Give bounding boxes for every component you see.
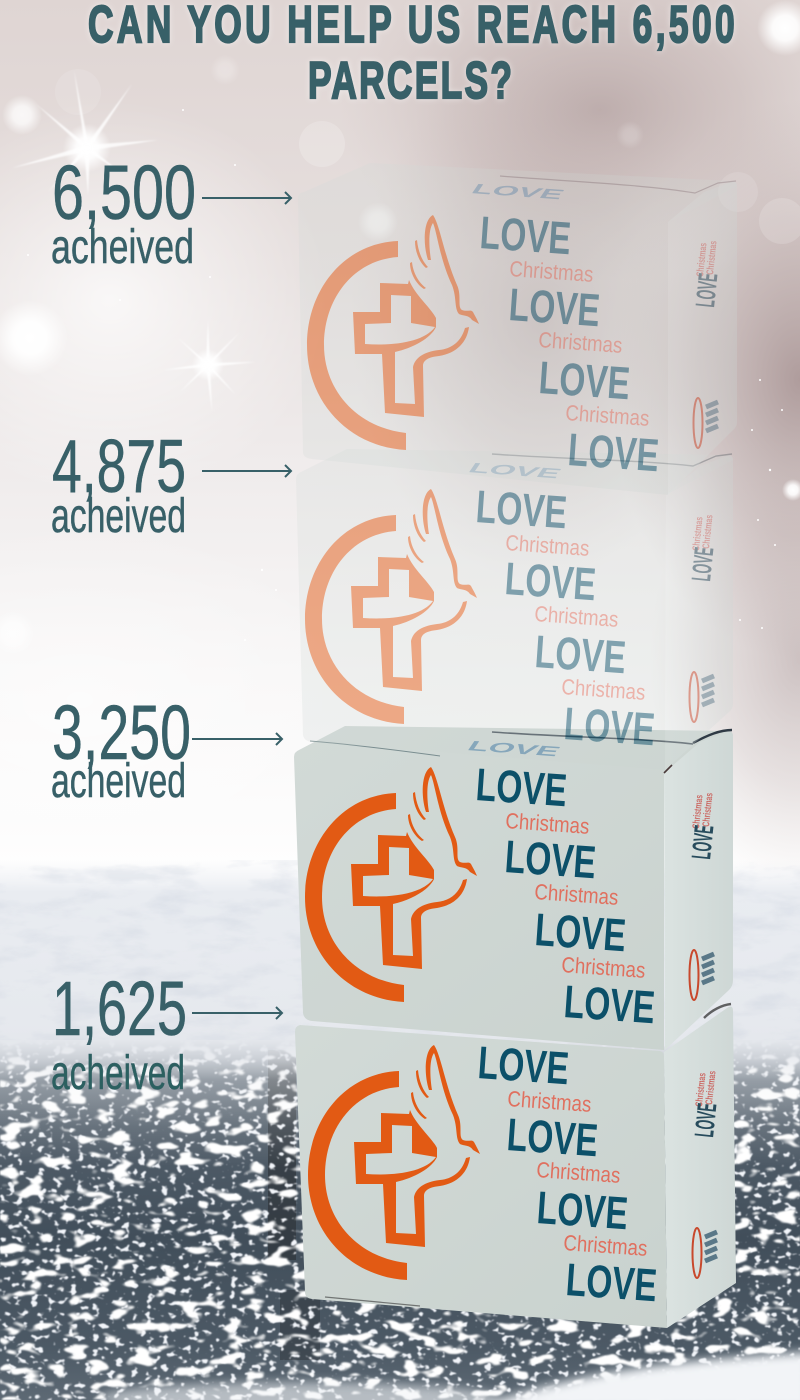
- milestone: 1,625 achieved: [51, 966, 187, 1100]
- box 4 side face: [668, 182, 737, 495]
- box 2 side print: LOVE: [686, 824, 720, 861]
- background: frosted snow bank: [0, 860, 800, 1060]
- sparkle star middle left: [164, 320, 256, 412]
- title: PARCELS?: [308, 52, 512, 110]
- box 3 side print: LOVE: [686, 546, 720, 583]
- box 4 love and christmas print: Christmas: [509, 256, 594, 287]
- box 1 side print: Christmas: [704, 1070, 719, 1105]
- box 2 love and christmas print: Christmas: [534, 879, 619, 910]
- sparkle star right edge: [782, 479, 800, 501]
- milestone: 6,500 achieved: 6,500: [52, 150, 196, 236]
- box 3 love and christmas print: Christmas: [534, 601, 619, 632]
- milestone: 3,250 achieved: acheived: [51, 755, 186, 808]
- box 4 love and christmas print: Christmas: [538, 327, 623, 358]
- box 2 love and christmas print: Christmas: [505, 808, 590, 839]
- box 3 flap print: LOVE: [465, 460, 565, 482]
- arrow: 1,625 to box: [192, 1007, 282, 1019]
- box 1 love and christmas print: LOVE: [476, 1036, 571, 1094]
- box 4 charity logo: [307, 215, 479, 450]
- box 3 love and christmas print: LOVE: [533, 625, 628, 683]
- bokeh lights and sparkle dots: [0, 0, 800, 655]
- box 3 love and christmas print: [474, 480, 657, 755]
- box 3 side print: [686, 514, 720, 722]
- box 1 front face: [295, 1025, 667, 1328]
- milestone: 1,625 achieved: 1,625: [52, 966, 187, 1052]
- milestone: 3,250 achieved: 3,250: [52, 690, 191, 776]
- box 1 charity logo: [308, 1045, 480, 1280]
- box 1 side face: [664, 1007, 736, 1328]
- box 1 (bottom, achieved): [295, 1004, 736, 1328]
- box 1 side print: Christmas: [694, 1072, 709, 1107]
- box 2 flap print: LOVE: [464, 738, 564, 760]
- box 2 love and christmas print: LOVE: [503, 830, 598, 888]
- box 2 love and christmas print: LOVE: [562, 975, 657, 1033]
- arrow: 3,250 to box: [192, 733, 282, 745]
- box 2 side face: [664, 732, 733, 1050]
- box 4 side print: LOVE: [690, 272, 724, 309]
- box 2 charity logo: [305, 767, 477, 1002]
- title: [88, 0, 735, 110]
- box 3 love and christmas print: LOVE: [474, 480, 569, 538]
- box 4 love and christmas print: LOVE: [478, 206, 573, 264]
- background: blurred winter sky: [0, 0, 800, 900]
- arrow: 6,500 to box: [202, 192, 291, 204]
- box 3 side print: Christmas: [701, 514, 716, 549]
- box 3 love and christmas print: LOVE: [503, 552, 598, 610]
- box 2 love and christmas print: LOVE: [533, 903, 628, 961]
- box 2 (second, achieved): [294, 726, 733, 1050]
- box 4 front and top face: [298, 163, 737, 495]
- box 2 side print: Christmas: [691, 794, 706, 829]
- milestone: 6,500 achieved: acheived: [51, 221, 194, 274]
- box 1 side print: LOVE: [689, 1102, 723, 1139]
- box 4 (faded, target 6,500): [298, 163, 737, 495]
- box 1 love and christmas print: LOVE: [564, 1253, 659, 1311]
- box 4 love and christmas print: LOVE: [507, 278, 602, 336]
- arrow: 4,875 to box: [202, 465, 291, 477]
- box 4 flap print: LOVE: [468, 181, 568, 203]
- box 1 love and christmas print: Christmas: [536, 1157, 621, 1188]
- box 2 side print: [686, 792, 720, 1000]
- box 2 side print: Christmas: [701, 792, 716, 827]
- box 2 love and christmas print: LOVE: [474, 758, 569, 816]
- box 1 love and christmas print: LOVE: [505, 1108, 600, 1166]
- box 1 love and christmas print: Christmas: [563, 1230, 648, 1261]
- box 4 love and christmas print: [478, 206, 661, 481]
- box 4 side print: Christmas: [695, 242, 710, 277]
- box 3 love and christmas print: Christmas: [505, 530, 590, 561]
- box 2 love and christmas print: Christmas: [561, 952, 646, 983]
- box 3 side face: [665, 456, 733, 770]
- box 4 side print: Christmas: [705, 240, 720, 275]
- milestone: 4,875 achieved: acheived: [51, 490, 186, 543]
- box 3 front and top face: [296, 449, 733, 770]
- box 1 love and christmas print: LOVE: [535, 1181, 630, 1239]
- box 1 love and christmas print: [476, 1036, 659, 1311]
- milestone: 4,875 achieved: 4,875: [52, 424, 186, 508]
- milestone: 3,250 achieved: [51, 690, 191, 808]
- box 3 charity logo: [305, 489, 477, 724]
- box 1 side print: [689, 1070, 723, 1278]
- box 3 love and christmas print: Christmas: [561, 674, 646, 705]
- box 4 side print: [690, 240, 724, 448]
- box 1 love and christmas print: Christmas: [507, 1086, 592, 1117]
- box 3 side print: Christmas: [691, 516, 706, 551]
- box 3 (faded, target 4,875): [296, 449, 733, 770]
- milestone: 6,500 achieved: [51, 150, 196, 274]
- background: dark icy ground with snow: [0, 1040, 800, 1400]
- box 4 love and christmas print: Christmas: [565, 400, 650, 431]
- milestone: 4,875 achieved: [51, 424, 186, 543]
- box 4 love and christmas print: LOVE: [566, 423, 661, 481]
- milestone: 1,625 achieved: acheived: [51, 1047, 185, 1100]
- box 3 love and christmas print: LOVE: [562, 697, 657, 755]
- box 2 front and top face: [294, 726, 733, 1050]
- box 4 love and christmas print: LOVE: [537, 351, 632, 409]
- sparkle star upper left: [12, 70, 158, 195]
- box 2 love and christmas print: [474, 758, 657, 1033]
